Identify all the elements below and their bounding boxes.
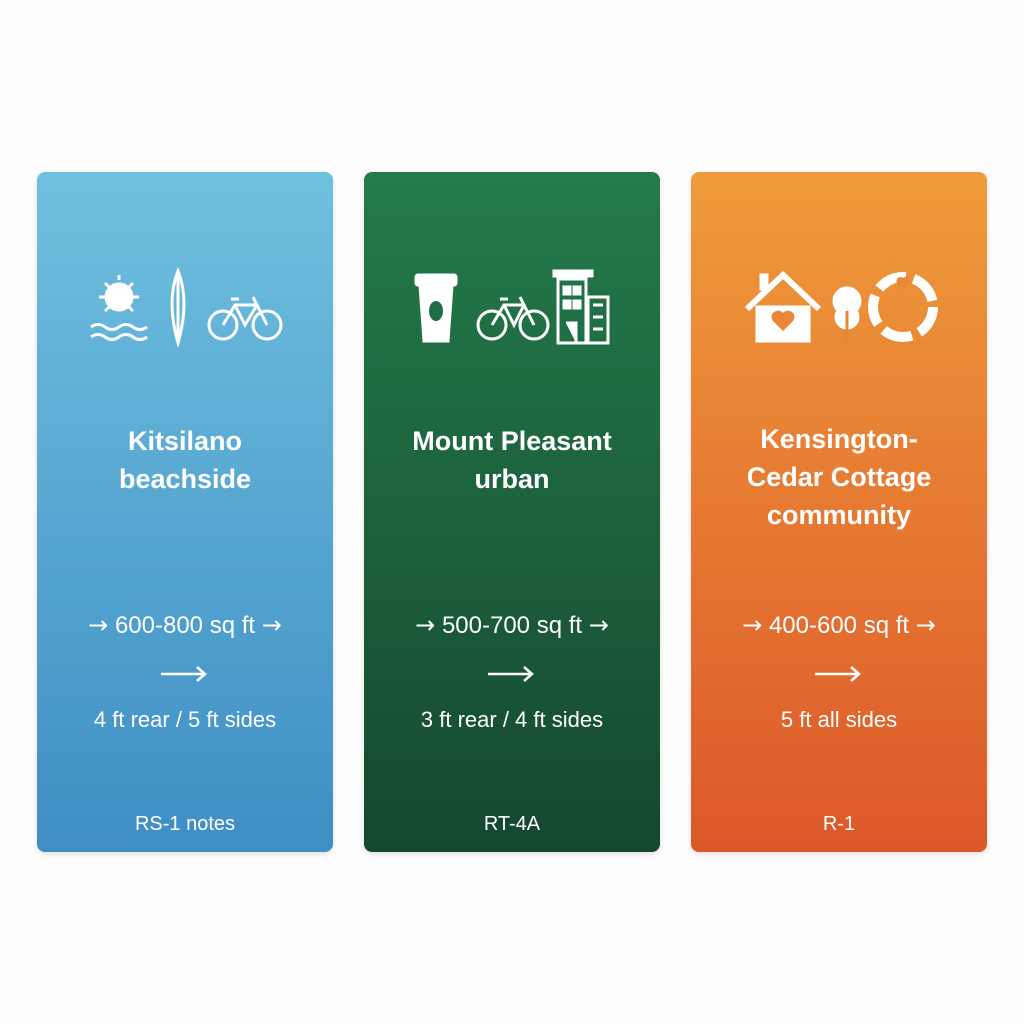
size range: → 400-600 sq ft →: [742, 611, 936, 639]
setbacks: 4 ft rear / 5 ft sides: [94, 707, 276, 732]
icons: coffee, bike, building: [414, 270, 610, 344]
setbacks: 3 ft rear / 4 ft sides: [421, 707, 603, 732]
size range: → 600-800 sq ft →: [88, 611, 282, 639]
title: [412, 426, 612, 494]
title: Cedar Cottage: [747, 462, 931, 492]
title: Mount Pleasant: [412, 426, 612, 456]
panel: Kitsilano: [37, 172, 333, 852]
icons: sun, surfboard, bike: [90, 267, 282, 347]
zoning note: R-1: [823, 813, 855, 835]
zoning note: RT-4A: [484, 813, 540, 835]
setbacks: 5 ft all sides: [781, 707, 897, 732]
size range: → 500-700 sq ft →: [415, 611, 609, 639]
panel: Mount Pleasant: [364, 172, 660, 852]
arrow: [488, 666, 534, 682]
title: [119, 426, 251, 494]
title: community: [767, 500, 911, 530]
title: Kitsilano: [128, 426, 242, 456]
title: Kensington-: [760, 424, 918, 454]
arrow: [161, 666, 207, 682]
zoning note: RS-1 notes: [135, 813, 235, 835]
title: urban: [474, 464, 550, 494]
title: [747, 424, 931, 530]
panel: Kensington-Cedar Cottage: [691, 172, 987, 852]
title: beachside: [119, 464, 251, 494]
icons: house heart, tree, hands: [745, 271, 938, 342]
arrow: [815, 666, 861, 682]
